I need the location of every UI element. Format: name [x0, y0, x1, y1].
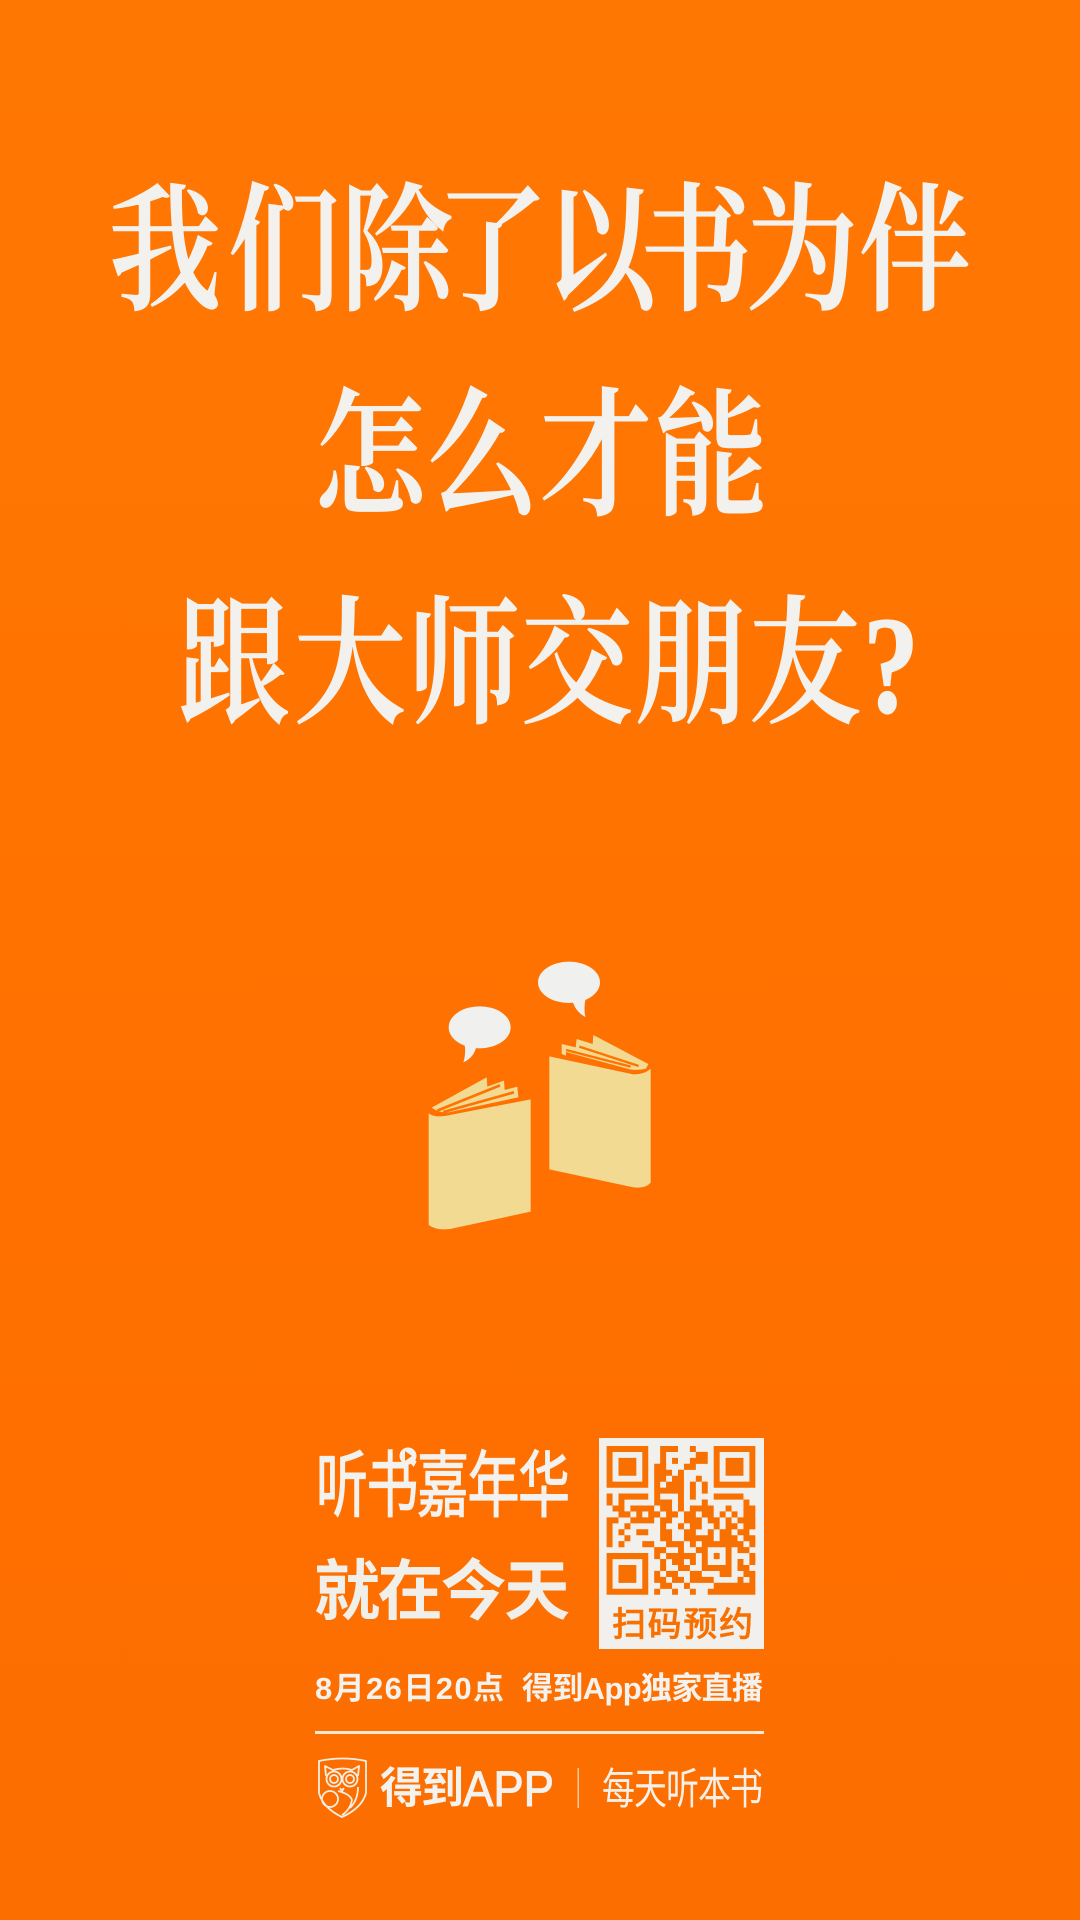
brand name: 得到: [380, 1765, 464, 1813]
brand name: APP: [463, 1761, 554, 1817]
QR panel: [599, 1438, 764, 1649]
icon: owl shield logo: [319, 1758, 366, 1817]
slogan: 每天听本书: [602, 1766, 763, 1814]
divider: [578, 1768, 579, 1808]
broadcast time: [315, 1671, 763, 1706]
broadcast time: 得到App独家直播: [522, 1671, 763, 1706]
illustration: talking books: [429, 962, 651, 1229]
broadcast time: 8月26日20点: [315, 1671, 504, 1706]
title line 1: 我们除了以书为伴: [109, 177, 971, 330]
QR code: [607, 1449, 755, 1592]
QR caption: 扫码预约: [612, 1606, 753, 1644]
icon: right book: [549, 1035, 651, 1188]
event heading: 听书嘉年华: 听书嘉年华: [316, 1447, 570, 1527]
icon: left speech bubble: [449, 1006, 511, 1062]
icon: left book: [429, 1077, 531, 1229]
event subheading: 就在今天: 就在今天: [314, 1554, 570, 1628]
title line 2: 怎么才能: [314, 382, 767, 535]
title line 3: 跟大师交朋友?: [178, 590, 919, 743]
brand name: [380, 1761, 554, 1817]
icon: right speech bubble: [538, 962, 600, 1017]
title: [109, 177, 971, 743]
